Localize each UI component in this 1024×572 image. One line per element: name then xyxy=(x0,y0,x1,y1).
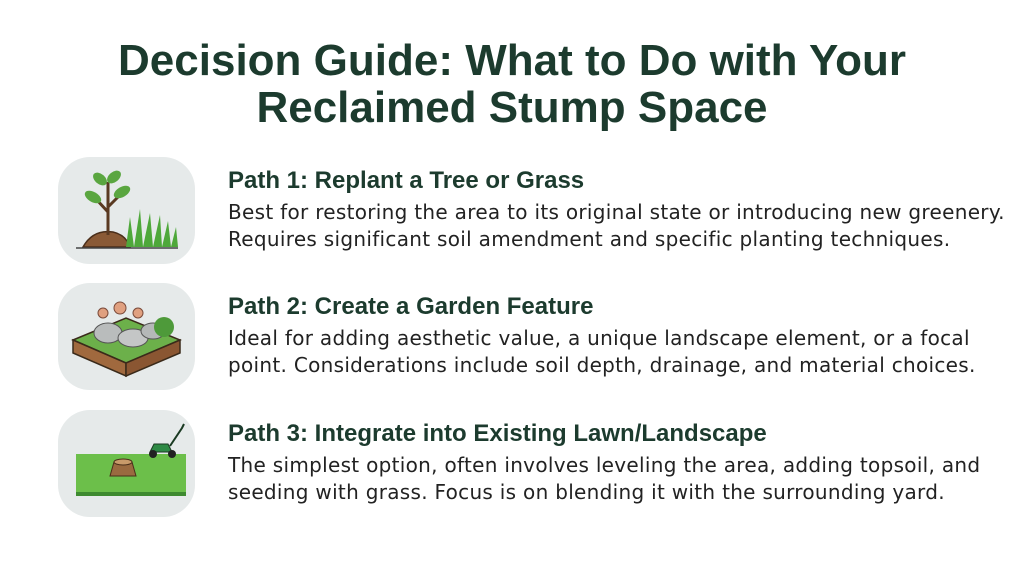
heading 2: Path 2: Create a Garden Feature xyxy=(228,293,593,320)
body 2: point. Considerations include soil depth, drainage, and material choices. xyxy=(228,353,976,377)
body 1: Requires significant soil amendment and specific planting techniques. xyxy=(228,227,950,251)
path 1 text xyxy=(228,167,1005,251)
icon: lawn with stump and mower xyxy=(58,410,195,517)
icon: garden bed xyxy=(58,283,195,390)
title xyxy=(118,36,906,132)
body 1 xyxy=(228,200,1005,251)
title: Reclaimed Stump Space xyxy=(256,83,768,132)
body 3 xyxy=(228,453,980,504)
body 2: Ideal for adding aesthetic value, a unique landscape element, or a focal xyxy=(228,326,970,350)
body 3: The simplest option, often involves leveling the area, adding topsoil, and xyxy=(228,453,980,477)
path 2 text xyxy=(228,293,976,377)
heading 1: Path 1: Replant a Tree or Grass xyxy=(228,167,584,194)
body 1: Best for restoring the area to its original state or introducing new greenery. xyxy=(228,200,1005,224)
heading 3: Path 3: Integrate into Existing Lawn/Landscape xyxy=(228,420,767,447)
body 3: seeding with grass. Focus is on blending it with the surrounding yard. xyxy=(228,480,945,504)
title: Decision Guide: What to Do with Your xyxy=(118,36,906,85)
icon: sapling and grass xyxy=(58,157,195,264)
body 2 xyxy=(228,326,976,377)
path 3 text xyxy=(228,420,980,504)
